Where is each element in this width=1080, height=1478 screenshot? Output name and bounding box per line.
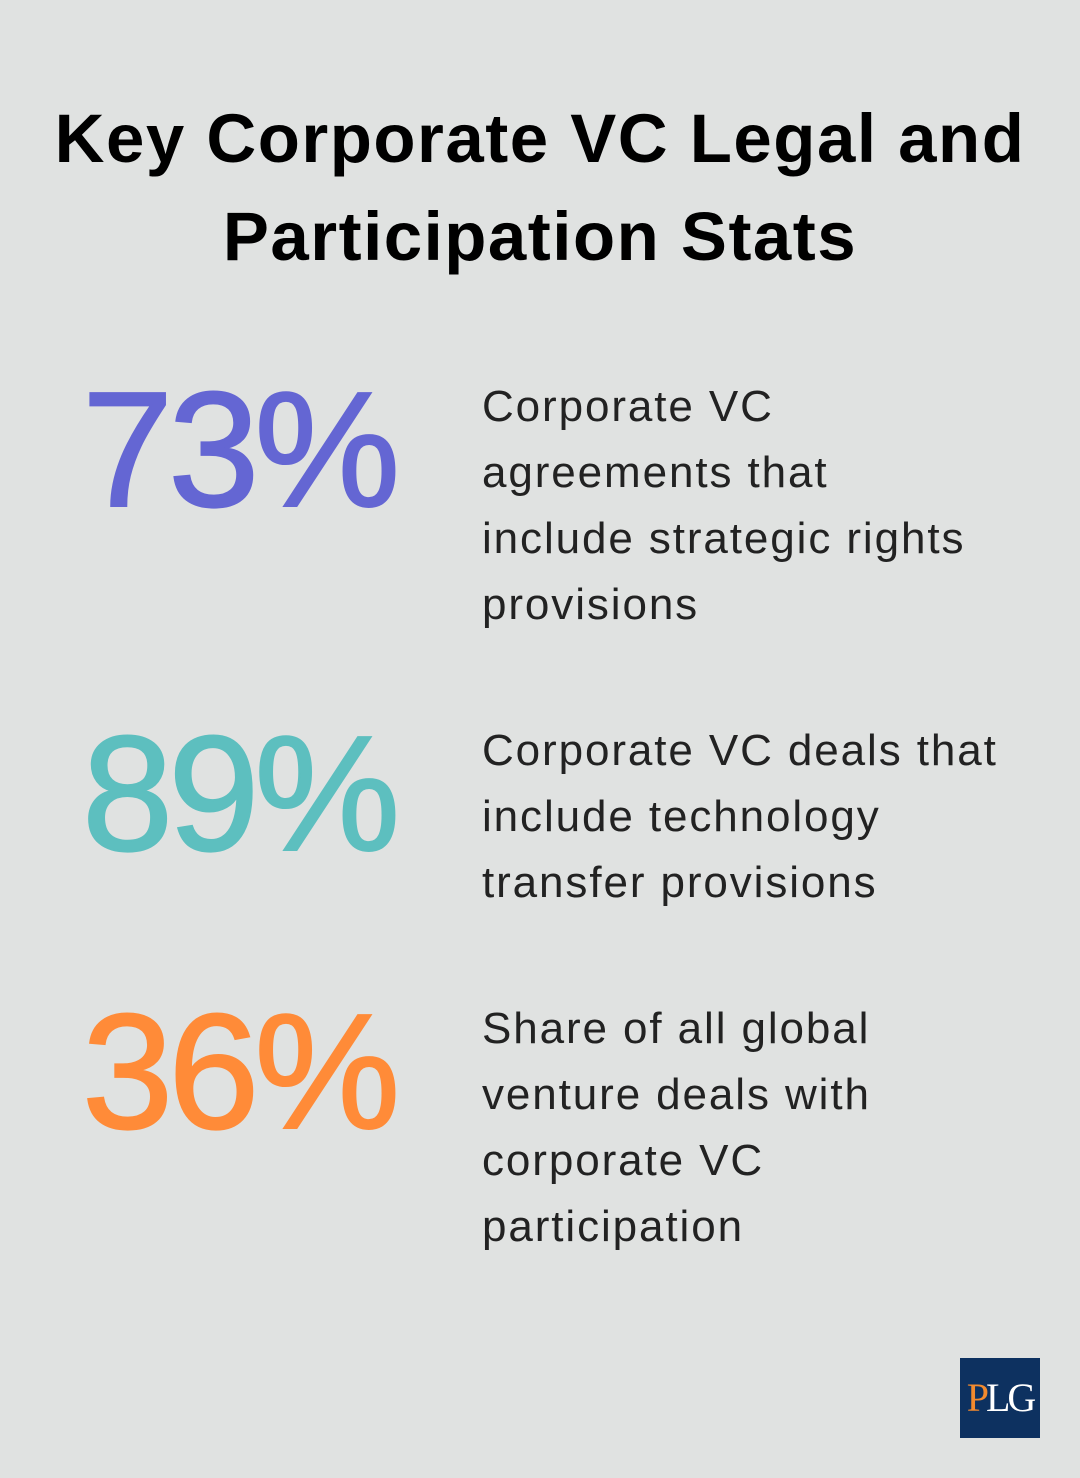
title: Participation Stats bbox=[223, 198, 857, 275]
stat 3 description bbox=[482, 1004, 871, 1251]
stat 2 description: transfer provisions bbox=[482, 858, 878, 907]
stat 2 number: 89% bbox=[82, 702, 395, 885]
stat 3 description: corporate VC bbox=[482, 1136, 764, 1185]
title: Key Corporate VC Legal and bbox=[55, 100, 1025, 177]
stat 3 number: 36% bbox=[82, 980, 395, 1163]
stat 2 description bbox=[482, 726, 998, 907]
logo bbox=[960, 1358, 1040, 1438]
stat 3 description: Share of all global bbox=[482, 1004, 870, 1053]
stat 2 description: include technology bbox=[482, 792, 881, 841]
stat 1 description: include strategic rights bbox=[482, 514, 965, 563]
stat 1 number: 73% bbox=[82, 358, 395, 541]
stat 1 description: agreements that bbox=[482, 448, 828, 497]
stat 1 description: provisions bbox=[482, 580, 699, 629]
stat 1 description: Corporate VC bbox=[482, 382, 774, 431]
stat 2 description: Corporate VC deals that bbox=[482, 726, 998, 775]
stat 3 description: participation bbox=[482, 1202, 744, 1251]
logo: PLG bbox=[967, 1375, 1033, 1420]
stat 3 description: venture deals with bbox=[482, 1070, 871, 1119]
title bbox=[55, 100, 1025, 275]
stat 1 description bbox=[482, 382, 965, 629]
